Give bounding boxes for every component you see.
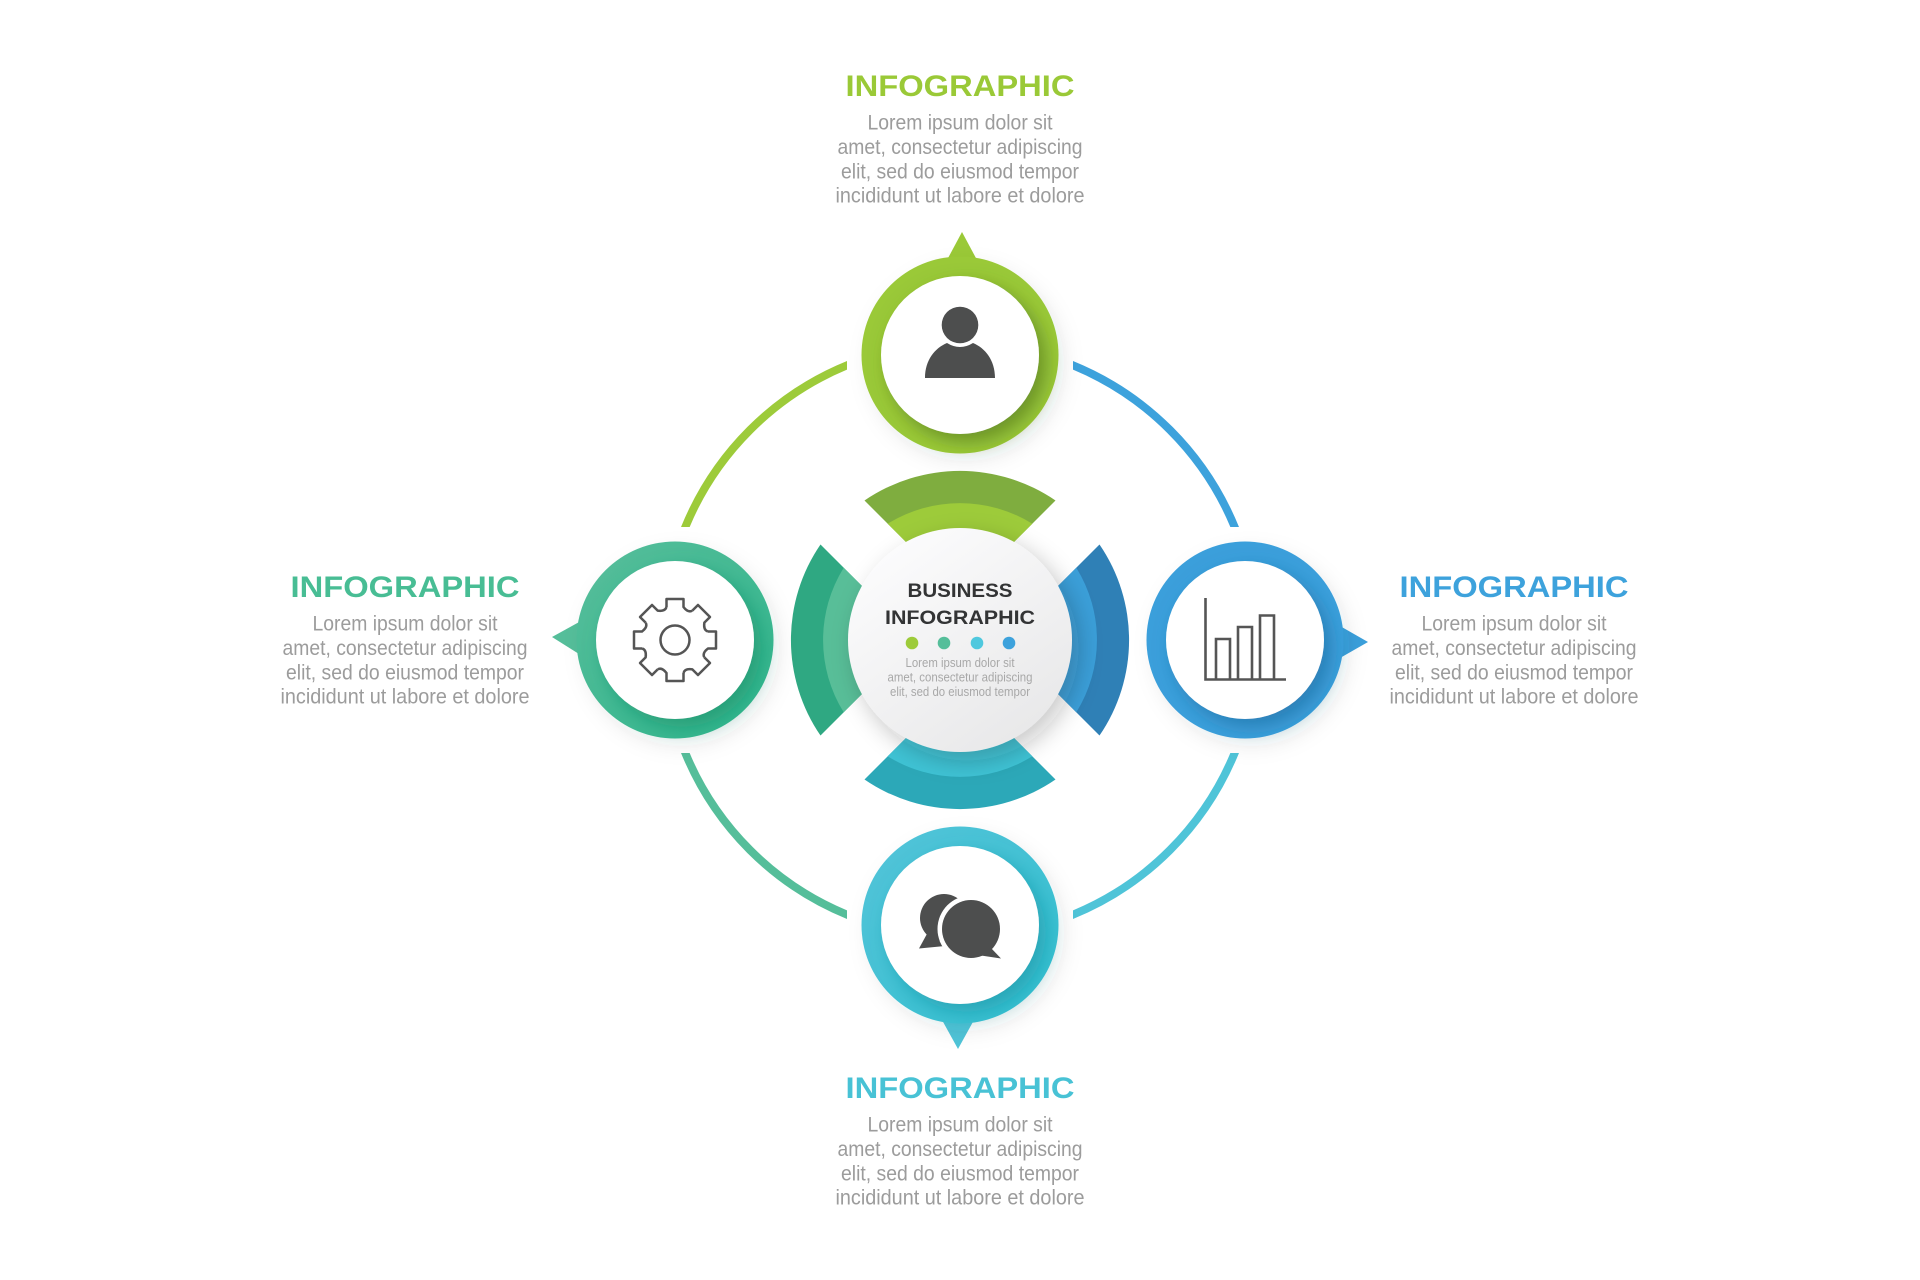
- pointer: right: [1340, 626, 1368, 658]
- text block: bottom: INFOGRAPHIC: [846, 1072, 1074, 1105]
- text block: bottom: amet, consectetur adipiscing: [838, 1138, 1082, 1161]
- center title: BUSINESS: [908, 580, 1012, 602]
- text block: left: elit, sed do eiusmod tempor: [286, 661, 524, 684]
- text block: bottom: incididunt ut labore et dolore: [836, 1187, 1084, 1210]
- text block: right: amet, consectetur adipiscing: [1392, 637, 1636, 660]
- text block: left: incididunt ut labore et dolore: [280, 686, 530, 709]
- text block: right: Lorem ipsum dolor sit: [1422, 612, 1607, 635]
- text block: left: INFOGRAPHIC: [290, 571, 520, 604]
- arc: bottom-left connector: [681, 753, 847, 919]
- text block: top: incididunt ut labore et dolore: [836, 185, 1084, 208]
- icon: bar chart: [1206, 598, 1286, 680]
- arc: bottom-right connector: [1073, 753, 1239, 919]
- text block: top: amet, consectetur adipiscing: [838, 136, 1082, 159]
- center title: [885, 580, 1035, 629]
- node: left gear: [552, 542, 774, 738]
- text block: top: Lorem ipsum dolor sit: [868, 111, 1053, 134]
- wedge: bottom cyan: [864, 684, 1056, 809]
- arc: top-right connector: [1073, 361, 1239, 527]
- center body text: [888, 655, 1032, 699]
- text block: right: INFOGRAPHIC: [1400, 571, 1628, 604]
- pointer: bottom: [942, 1020, 974, 1049]
- text block: bottom: elit, sed do eiusmod tempor: [841, 1162, 1079, 1185]
- text block: left: amet, consectetur adipiscing: [282, 637, 528, 660]
- text block: top: elit, sed do eiusmod tempor: [841, 160, 1079, 183]
- pointer: left: [552, 621, 581, 654]
- icon: gear: [634, 599, 716, 681]
- center body text: elit, sed do eiusmod tempor: [890, 684, 1031, 699]
- icon: speech bubbles: [919, 894, 1004, 962]
- text block: top: [836, 70, 1084, 208]
- text block: left: Lorem ipsum dolor sit: [312, 612, 498, 635]
- arc: top-left connector: [681, 361, 847, 527]
- center body text: amet, consectetur adipiscing: [888, 670, 1032, 684]
- wedge: left green-teal: [791, 544, 916, 736]
- pointer: top: [947, 232, 977, 260]
- center body text: Lorem ipsum dolor sit: [906, 655, 1015, 670]
- node: right chart: [1146, 542, 1368, 738]
- center colour dots: [906, 637, 1015, 649]
- node: top person: [862, 232, 1058, 454]
- wedge: right blue: [1004, 544, 1129, 736]
- icon: person: [925, 307, 995, 378]
- wedge: top green: [864, 471, 1056, 596]
- text block: top: INFOGRAPHIC: [846, 70, 1074, 103]
- text block: left: [280, 571, 530, 709]
- node: bottom chat: [862, 826, 1058, 1049]
- center title: INFOGRAPHIC: [885, 607, 1035, 629]
- text block: bottom: [836, 1072, 1084, 1210]
- text block: bottom: Lorem ipsum dolor sit: [868, 1113, 1053, 1136]
- text block: right: [1390, 571, 1638, 709]
- text block: right: incididunt ut labore et dolore: [1390, 686, 1638, 709]
- text block: right: elit, sed do eiusmod tempor: [1395, 661, 1633, 684]
- center circle panel: [848, 528, 1072, 752]
